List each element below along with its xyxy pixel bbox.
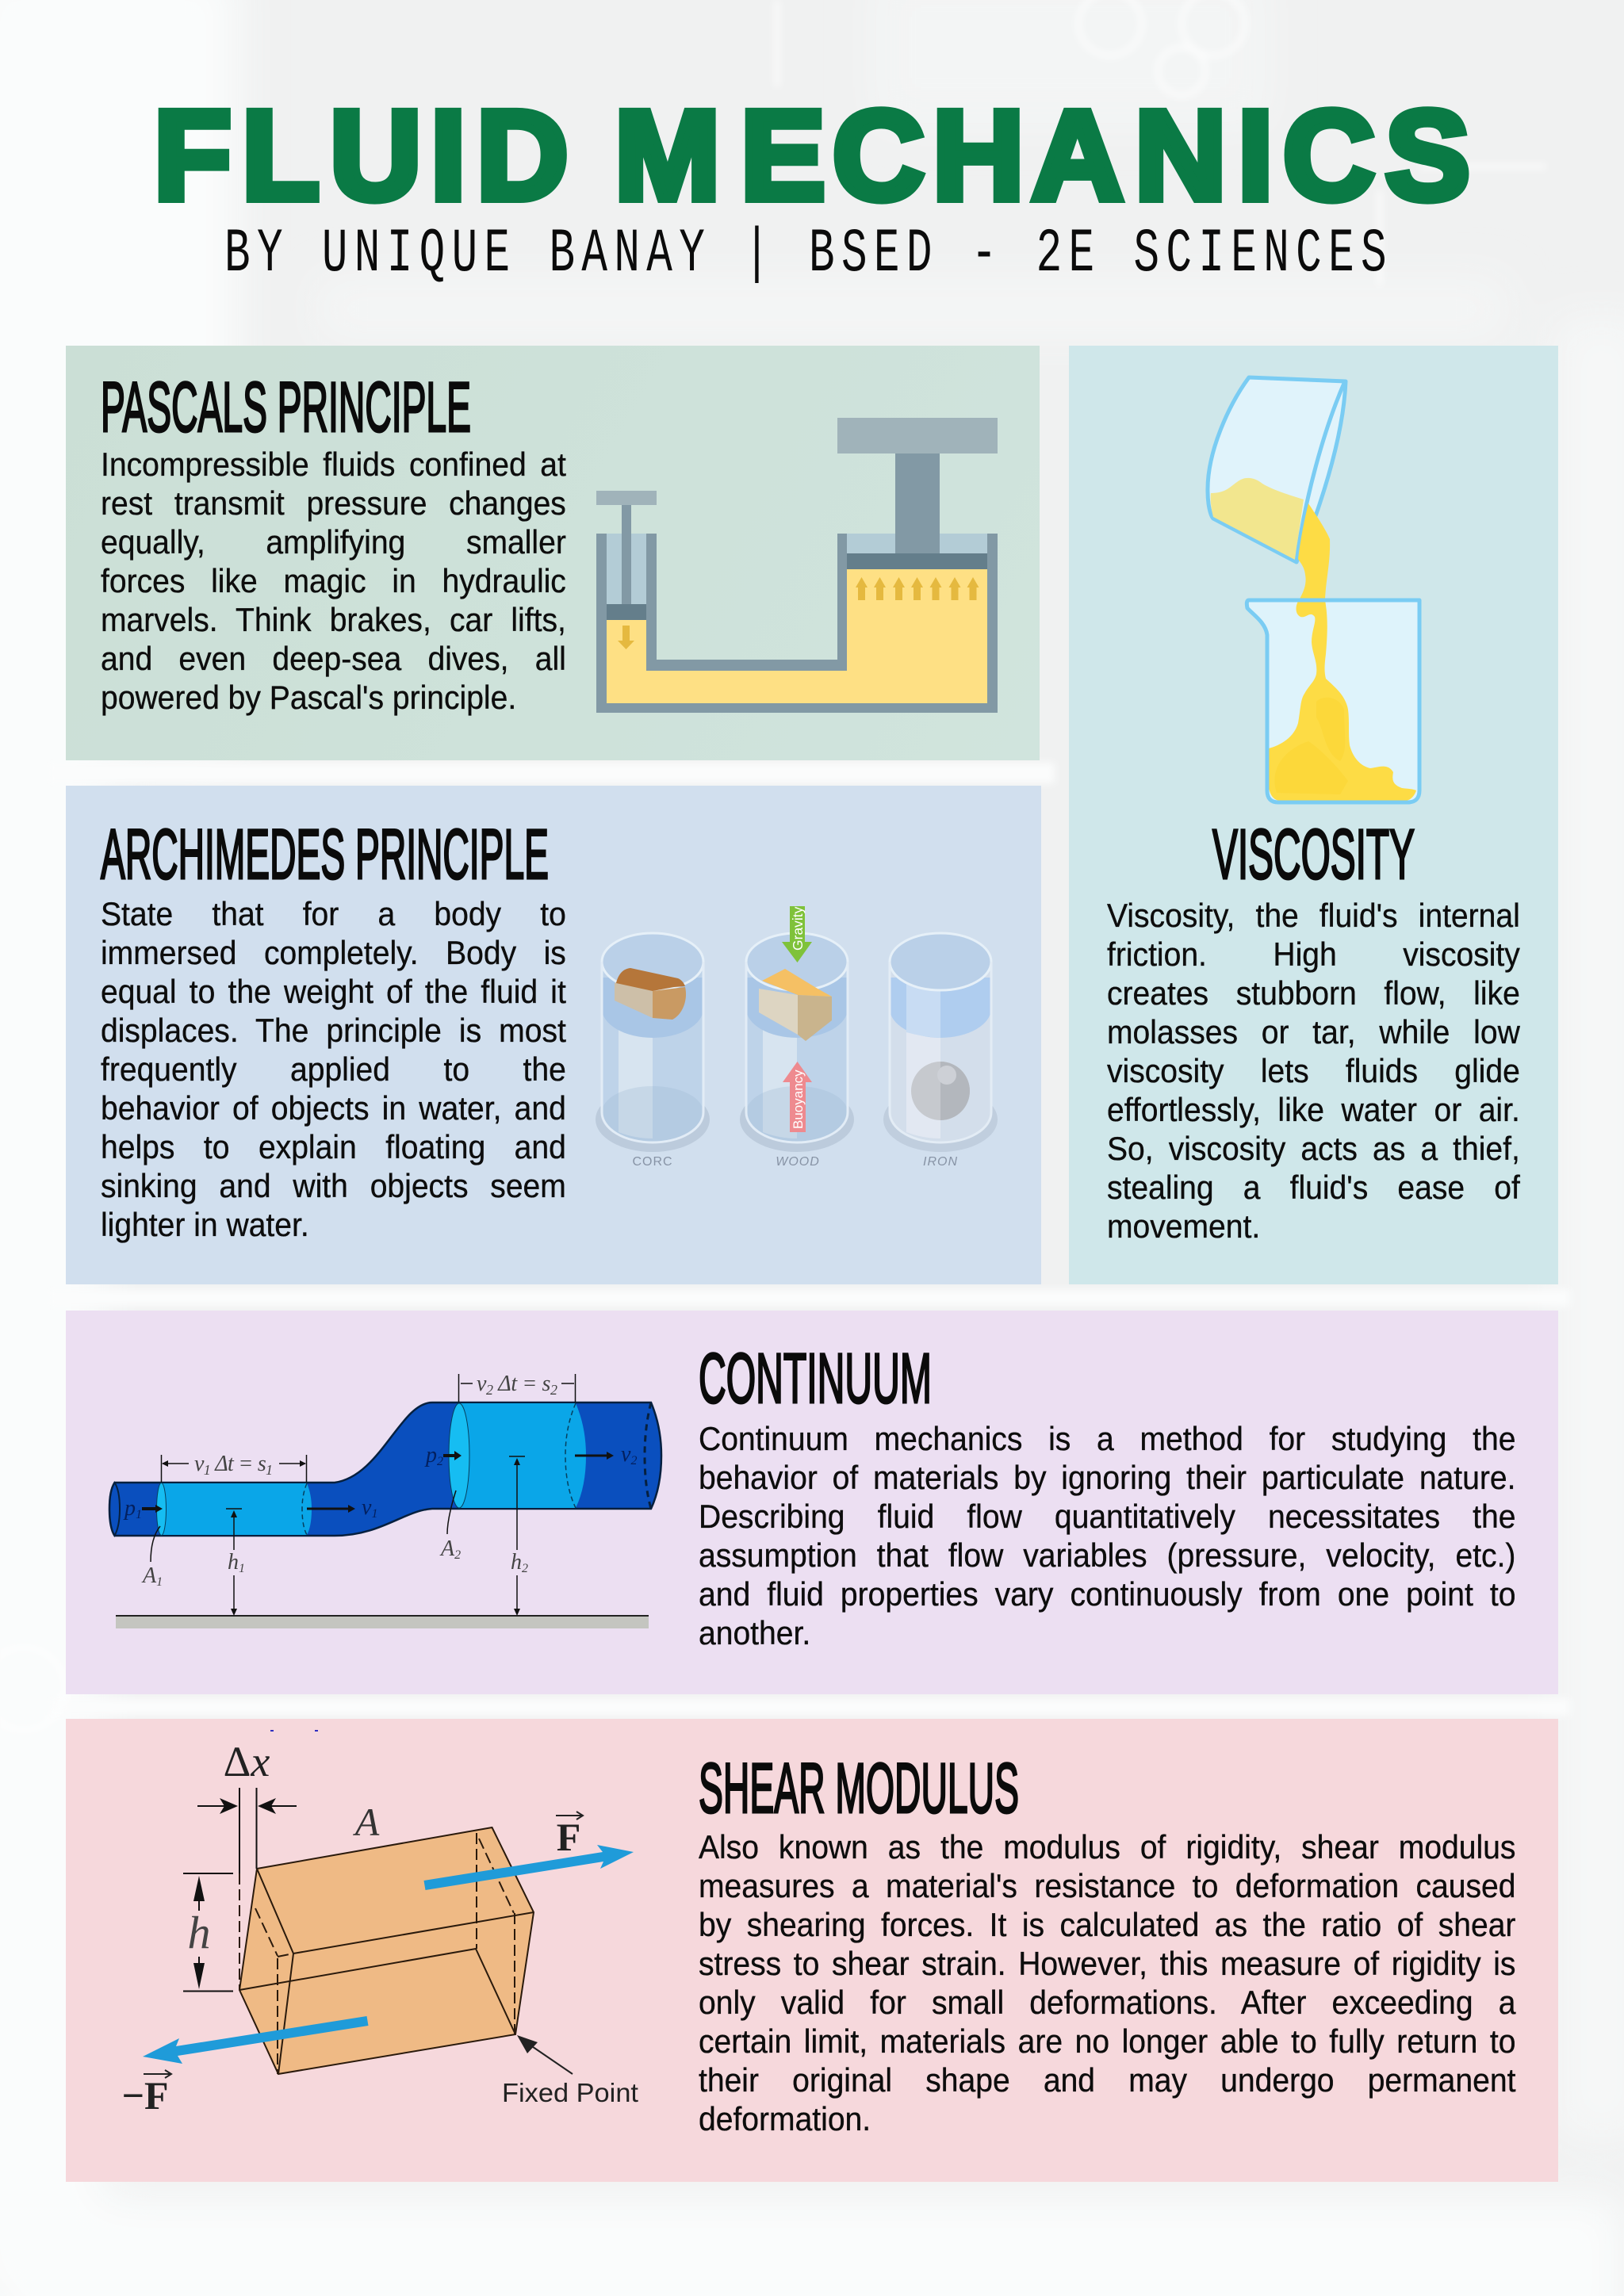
text: Pascal description: rest transmit pressure changes — [101, 484, 566, 522]
text: viscosity description: creates stubborn flow, like — [1107, 974, 1520, 1012]
text: shear modulus description: measures a material's resistance to deformation caused — [699, 1867, 1515, 1904]
text: Archimedes description: frequently applied to the — [101, 1050, 566, 1088]
dimension delta x — [197, 1738, 297, 1873]
diagram: hydraulic press — [596, 418, 998, 713]
formula labels: 2 — [550, 1382, 557, 1398]
arrows: output pressure up — [856, 577, 979, 600]
formula labels: 2 — [454, 1548, 461, 1562]
panel: shear modulus — [66, 1719, 1558, 2182]
text: Archimedes description — [101, 895, 566, 1243]
diagram: three glasses — [596, 906, 998, 1169]
formula labels: v — [621, 1442, 630, 1467]
object: wood block — [759, 969, 832, 1041]
panel: Pascal's principle — [66, 346, 1040, 760]
formula labels: v — [194, 1452, 204, 1476]
panel: continuum — [66, 1311, 1558, 1694]
formula labels: 2 — [522, 1562, 528, 1575]
text: viscosity description: effortlessly, like water or air. — [1107, 1091, 1520, 1128]
text: shear modulus description: certain limit, materials are no longer able to fully return to — [699, 2022, 1515, 2060]
text: shear modulus description: their original shape and may undergo permanent — [699, 2061, 1515, 2099]
block — [239, 1827, 534, 2074]
label minus F: −F — [121, 2073, 169, 2118]
heading: Shear Modulus: SHEAR MODULUS — [699, 1748, 1019, 1827]
text: Archimedes description: helps to explain floating and — [101, 1128, 566, 1165]
formula labels: 1 — [371, 1507, 377, 1521]
text: viscosity description: friction. High viscosity — [1107, 936, 1520, 973]
text: Pascal description — [101, 446, 566, 716]
formula labels: 1 — [266, 1462, 273, 1478]
callout: fixed point — [502, 2035, 638, 2107]
text: continuum description: Describing fluid flow quantitatively necessitates the — [699, 1498, 1515, 1535]
text: viscosity description: movement. — [1107, 1207, 1260, 1245]
arrow: input force down — [618, 626, 634, 649]
text: viscosity description: So, viscosity acts as a thief, — [1107, 1130, 1520, 1167]
text: viscosity description: Viscosity, the fluid's internal — [1107, 897, 1520, 934]
glass: iron — [883, 933, 998, 1152]
fluid segment 1 — [162, 1483, 312, 1535]
hidden edges dashed — [302, 1403, 576, 1535]
hydraulic fluid — [607, 569, 987, 703]
formula labels — [123, 1372, 637, 1589]
block solid edges — [239, 1827, 534, 2074]
dimension lines and arrows — [142, 1374, 609, 1614]
diagram: pouring viscous fluid — [1205, 376, 1421, 804]
text: shear modulus description: by shearing forces. It is calculated as the ratio of shear — [699, 1906, 1515, 1943]
text: Pascal description: equally, amplifying smaller — [101, 523, 566, 561]
text: viscosity description: viscosity lets fluids glide — [1107, 1052, 1520, 1089]
labels: materials: IRON — [923, 1155, 958, 1169]
glass: wood — [740, 933, 854, 1152]
formula labels: p — [426, 1443, 437, 1468]
text: viscosity description — [1107, 897, 1521, 1245]
text: shear modulus description: only valid for small deformations. After exceeding a — [699, 1984, 1515, 2021]
formula labels: 2 — [437, 1455, 443, 1468]
formula labels: h — [511, 1550, 522, 1575]
text: Archimedes description: behavior of objects in water, and — [101, 1089, 566, 1127]
text: Pascal description: and even deep-sea dives, all — [101, 640, 566, 677]
arrowheads — [155, 1451, 614, 1616]
pipe left end — [109, 1483, 120, 1536]
text: Archimedes description: State that for a body to — [101, 895, 566, 932]
block dashed edges — [239, 1833, 515, 2074]
fluid stream and pool — [1269, 503, 1416, 801]
formula labels: A — [441, 1536, 454, 1561]
cross section A1 — [157, 1483, 167, 1535]
air in cylinders — [607, 534, 988, 605]
fluid shading — [1274, 698, 1348, 794]
dimension h — [183, 1873, 233, 1992]
heading: Archimedes Principle: ARCHIMEDES PRINCIPLE — [101, 814, 549, 894]
text: Pascal description: Incompressible fluids confined at — [101, 446, 566, 483]
formula labels: 2 — [630, 1454, 637, 1468]
formula labels: 1 — [136, 1508, 142, 1521]
callout: fixed point: Fixed Point — [502, 2078, 638, 2107]
label F: F — [557, 1815, 580, 1859]
small piston — [596, 491, 657, 620]
large piston — [837, 418, 998, 569]
arrow: buoyancy — [783, 1062, 812, 1132]
ground — [116, 1616, 649, 1628]
formula labels: h — [228, 1550, 239, 1575]
labels: materials: CORC — [632, 1155, 673, 1169]
text: continuum description — [699, 1420, 1515, 1651]
text: shear modulus description — [699, 1827, 1515, 2138]
diagram: sheared block — [121, 1730, 638, 2118]
diagram: fluid flow through pipe — [108, 1372, 663, 1628]
dimension h: h — [187, 1907, 211, 1958]
lower beaker outline — [1247, 600, 1419, 802]
text: shear modulus description: deformation. — [699, 2100, 871, 2137]
text: shear modulus description: Also known as the modulus of rigidity, shear modulus — [699, 1828, 1515, 1866]
lower beaker fill — [1247, 600, 1419, 802]
text: continuum description: and fluid properties vary continuously from one point to — [699, 1575, 1515, 1613]
text: viscosity description: molasses or tar, while low — [1107, 1013, 1520, 1050]
text: continuum description: assumption that flow variables (pressure, velocity, etc.) — [699, 1536, 1515, 1574]
pipe right end dashed — [645, 1402, 651, 1509]
formula labels: 2 — [486, 1382, 493, 1398]
formula labels: A — [143, 1563, 156, 1588]
formula labels: Δt = s — [210, 1452, 266, 1476]
small marks — [270, 1730, 318, 1732]
text: Pascal description: forces like magic in hydraulic — [101, 562, 566, 599]
formula labels: p — [124, 1496, 136, 1521]
heading: Viscosity: VISCOSITY — [1212, 814, 1415, 894]
cross section A2 — [449, 1403, 469, 1508]
heading: Pascals Principle: PASCALS PRINCIPLE — [101, 367, 471, 446]
pipe body — [109, 1402, 661, 1536]
glass: cork — [596, 933, 710, 1152]
vessel walls — [596, 534, 998, 713]
text: Pascal description: powered by Pascal's principle. — [101, 679, 516, 716]
text: Archimedes description: equal to the weight of the fluid it — [101, 973, 566, 1010]
formula labels: Δt = s — [493, 1372, 550, 1396]
labels: materials — [632, 1155, 958, 1169]
arrow: gravity: Gravity — [790, 906, 806, 951]
text: shear modulus description: stress to shear strain. However, this measure of rigidity is — [699, 1945, 1515, 1982]
panel: viscosity — [1069, 346, 1558, 1284]
arrow: gravity — [782, 906, 812, 962]
arrow: force F — [423, 1845, 634, 1890]
text: Pascal description: marvels. Think brakes, car lifts, — [101, 601, 566, 638]
formula labels: v — [362, 1495, 371, 1520]
text: continuum description: Continuum mechanics is a method for studying the — [699, 1420, 1515, 1457]
formula labels: 1 — [204, 1462, 211, 1478]
panel: Archimedes principle — [66, 786, 1041, 1284]
object: cork piece — [615, 968, 686, 1020]
labels: materials: WOOD — [776, 1155, 820, 1169]
text: Archimedes description: displaces. The principle is most — [101, 1012, 566, 1049]
fluid in cup — [1211, 478, 1304, 560]
text: continuum description: another. — [699, 1614, 810, 1651]
formula labels: 1 — [239, 1562, 245, 1575]
object: iron ball — [911, 1062, 970, 1120]
title: FLUID MECHANICS — [154, 84, 1470, 226]
text: continuum description: behavior of materials by ignoring their particulate nature. — [699, 1459, 1515, 1496]
text: Archimedes description: lighter in water. — [101, 1206, 309, 1243]
formula labels: 1 — [156, 1575, 163, 1589]
cup inner lip — [1297, 381, 1345, 562]
fluid segment 2 — [459, 1403, 586, 1508]
arrow: buoyancy: Buoyancy — [791, 1070, 806, 1129]
label A: A — [353, 1800, 380, 1844]
dimension delta x: Δx — [224, 1738, 270, 1785]
text: Archimedes description: sinking and with objects seem — [101, 1167, 566, 1204]
heading: Continuum: CONTINUUM — [699, 1338, 932, 1418]
arrow: force minus F — [143, 2016, 368, 2064]
text: Archimedes description: immersed completely. Body is — [101, 934, 566, 971]
text: viscosity description: stealing a fluid's ease of — [1107, 1169, 1520, 1206]
upper cup — [1208, 377, 1346, 562]
formula labels: v — [477, 1372, 486, 1396]
